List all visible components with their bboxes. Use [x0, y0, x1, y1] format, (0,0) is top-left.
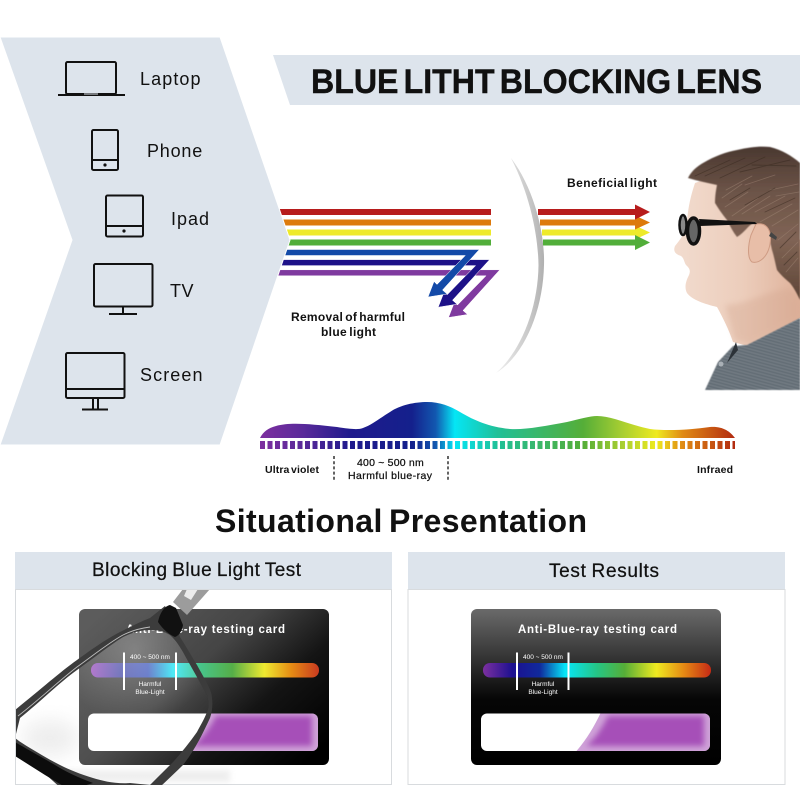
beneficial light arrows — [538, 204, 650, 250]
label: infrared: Infraed — [697, 464, 733, 476]
spectrum chart — [260, 402, 735, 482]
lens glare — [79, 630, 208, 765]
range labels — [523, 654, 563, 696]
panel: blocking blue light test — [15, 552, 392, 790]
arrow: navy — [270, 260, 490, 307]
man in profile wearing glasses — [674, 147, 800, 390]
temple arm — [173, 589, 210, 615]
card title: Anti-Blue-ray testing card — [126, 624, 285, 636]
frame lower shine — [16, 742, 93, 785]
glasses frame — [15, 606, 212, 790]
range labels: 400 ~ 500 nm — [130, 654, 170, 661]
caption: beneficial light: Beneficial light — [567, 176, 657, 190]
title: BLUE LITHT BLOCKING LENS — [311, 63, 762, 101]
glasses — [680, 215, 777, 244]
arrow: purple — [270, 270, 500, 318]
range labels: Blue-Light — [528, 689, 558, 696]
testing card — [471, 609, 721, 765]
label: ipad: Ipad — [171, 209, 210, 229]
icon: phone — [92, 130, 118, 170]
panel frame — [16, 590, 392, 784]
lens curve — [496, 158, 544, 373]
harmful range labels — [348, 457, 433, 482]
harmful range dividers — [334, 456, 448, 481]
neck and face — [674, 175, 800, 346]
range labels: Harmful — [139, 681, 162, 688]
label: screen: Screen — [140, 365, 204, 385]
label: tv: TV — [170, 281, 194, 301]
panel header — [15, 552, 392, 589]
hair strands — [695, 157, 799, 272]
caption: removal of harmful blue light: blue light — [321, 325, 376, 339]
test strip — [481, 714, 710, 751]
test strip — [88, 714, 318, 751]
heading: situational presentation: Situational Presentation — [215, 503, 587, 539]
testing card with glasses — [15, 589, 330, 790]
shadow under card — [60, 770, 230, 782]
hinge — [158, 605, 183, 637]
harmful range labels: Harmful blue-ray — [348, 470, 433, 482]
range labels: Harmful — [532, 681, 555, 688]
range markers — [516, 652, 570, 690]
icon: laptop — [58, 62, 125, 95]
incoming light rays — [270, 209, 491, 246]
label: phone: Phone — [147, 141, 203, 161]
harmful blue light arrows reflected — [270, 250, 500, 318]
icon: tv — [94, 264, 152, 314]
caption: removal of harmful blue light: Removal of harmful — [291, 310, 405, 324]
range markers — [123, 652, 177, 690]
shirt collar and button — [718, 342, 738, 366]
icon: screen — [66, 353, 124, 410]
panel header — [408, 552, 785, 589]
panel heading: Test Results — [549, 561, 659, 582]
ear — [748, 224, 770, 262]
card title: Anti-Blue-ray testing card — [518, 624, 677, 636]
caption: removal of harmful blue light — [291, 310, 405, 339]
soft shadow outside card — [22, 720, 78, 756]
arrow: blue — [270, 250, 479, 297]
harmful range labels: 400 ~ 500 nm — [357, 457, 424, 469]
card body — [471, 609, 721, 765]
panel: devices chevron — [0, 37, 290, 445]
shirt — [705, 318, 800, 390]
hair — [688, 147, 800, 300]
frame highlight — [18, 627, 150, 716]
panel frame — [408, 590, 785, 784]
range labels: Blue-Light — [135, 689, 165, 696]
panel heading: Blocking Blue Light Test — [92, 560, 302, 581]
range labels: 400 ~ 500 nm — [523, 654, 563, 661]
spectrum bar — [91, 663, 319, 678]
icon: ipad — [106, 196, 143, 236]
panel: test results — [408, 552, 785, 784]
title band — [273, 55, 800, 105]
neck shading — [725, 288, 800, 345]
spectrum hump — [260, 402, 735, 438]
card body — [79, 609, 329, 765]
spectrum ticks — [260, 441, 735, 449]
spectrum bar — [483, 663, 711, 678]
range labels — [130, 654, 170, 696]
label: laptop: Laptop — [140, 69, 202, 89]
label: ultra violet: Ultra violet — [265, 464, 320, 476]
